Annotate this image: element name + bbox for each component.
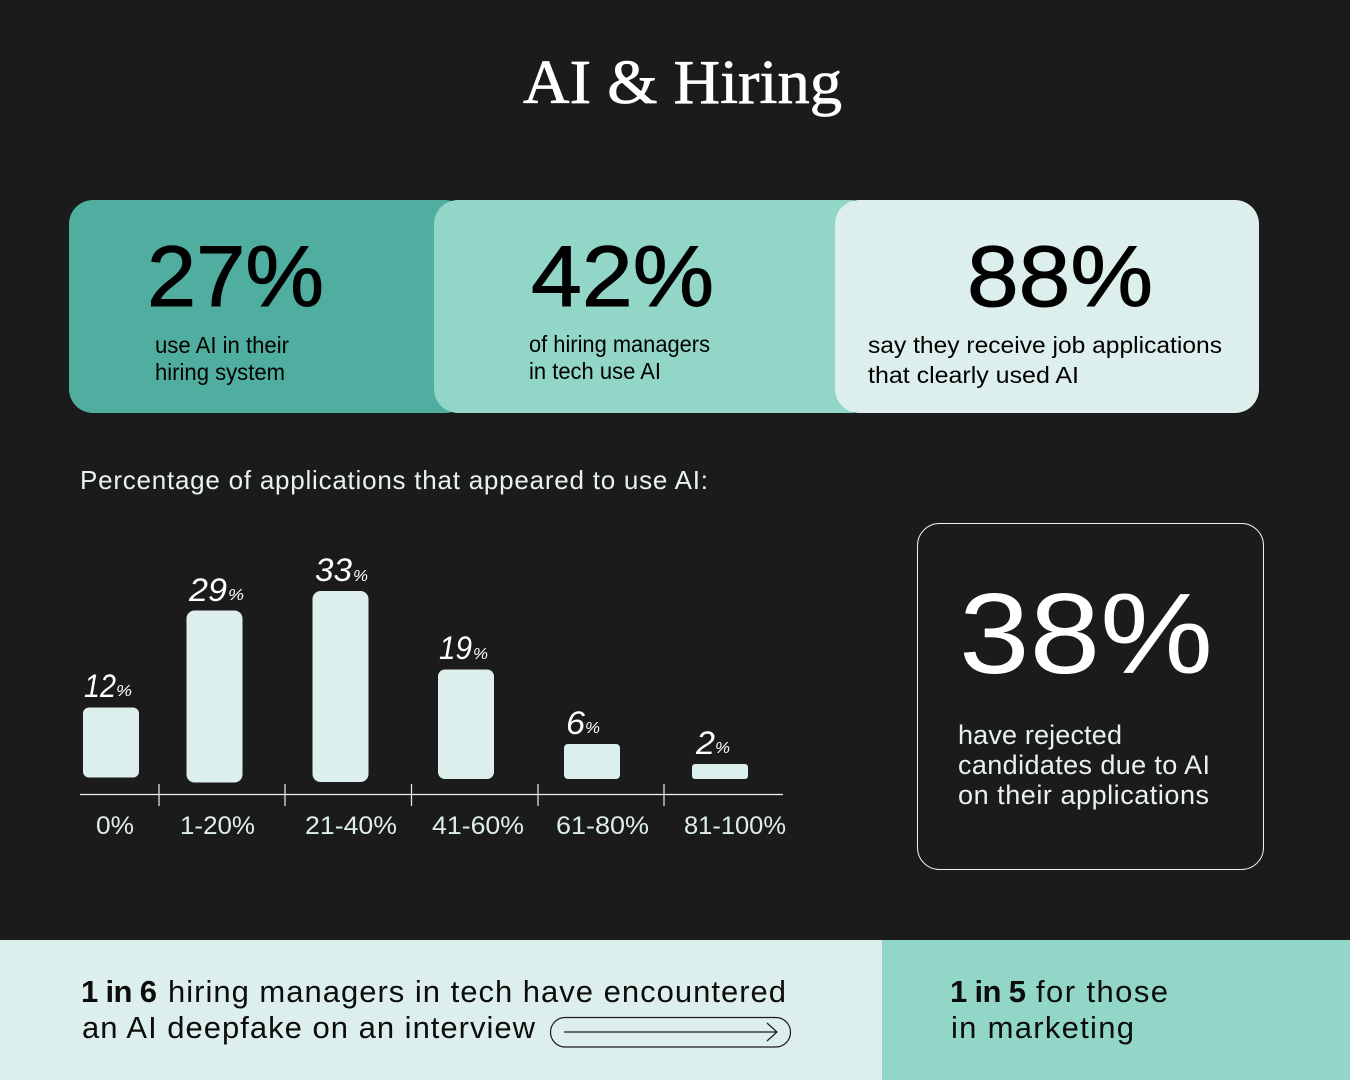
bar: 1-20%: 1-20% bbox=[180, 812, 255, 840]
panel: stat cards bbox=[69, 200, 1259, 413]
panel: 88% stat bbox=[835, 200, 1259, 413]
panel: 42% stat bbox=[434, 200, 874, 413]
panel: deepfake banner: hiring managers in tech have encountered bbox=[168, 974, 786, 1009]
panel: 38% callout: have rejected bbox=[958, 720, 1122, 750]
bar: 0%: 12 bbox=[84, 668, 116, 704]
title: AI & Hiring bbox=[523, 49, 842, 117]
chart heading: Percentage of applications that appeared to use AI: bbox=[80, 465, 708, 495]
bar: 61-80%: % bbox=[585, 720, 600, 737]
panel: deepfake banner bbox=[0, 940, 882, 1080]
panel: marketing banner bbox=[882, 940, 1350, 1080]
bar: 61-80% bbox=[556, 705, 649, 840]
panel: deepfake banner: an AI deepfake on an interview bbox=[82, 1010, 536, 1045]
panel: marketing banner: in marketing bbox=[951, 1010, 1134, 1045]
panel: marketing banner: 1 in 5 bbox=[950, 974, 1026, 1009]
bar: 81-100%: 81-100% bbox=[684, 812, 786, 840]
bar: 61-80%: 61-80% bbox=[556, 812, 649, 840]
panel: 27% stat: hiring system bbox=[155, 359, 285, 385]
panel: 38% callout bbox=[918, 524, 1264, 870]
panel: 42% stat: in tech use AI bbox=[529, 358, 661, 384]
panel: 88% stat: say they receive job applications bbox=[868, 332, 1222, 358]
panel: deepfake banner: 1 in 6 bbox=[81, 974, 157, 1009]
bar: 81-100%: % bbox=[715, 740, 730, 757]
bar: 41-60% bbox=[432, 630, 524, 840]
bar: 21-40% bbox=[305, 552, 397, 840]
bar: 21-40%: 33 bbox=[315, 552, 352, 588]
panel: 88% stat: that clearly used AI bbox=[868, 362, 1079, 388]
bar: 0% bbox=[83, 668, 139, 840]
bar: 41-60%: % bbox=[473, 646, 488, 663]
panel: marketing banner: for those bbox=[1036, 974, 1168, 1009]
bar: 21-40%: 21-40% bbox=[305, 812, 397, 840]
panel: 88% stat: 88% bbox=[967, 229, 1153, 325]
panel: 27% stat bbox=[69, 200, 469, 413]
panel: 38% callout: on their applications bbox=[958, 780, 1209, 810]
icon: arrow bbox=[550, 1018, 790, 1047]
panel: 27% stat: 27% bbox=[147, 229, 324, 325]
bar: 81-100% bbox=[684, 725, 786, 840]
bar: 41-60%: 41-60% bbox=[432, 812, 524, 840]
panel: 38% callout: 38% bbox=[959, 571, 1213, 698]
bar: 0%: % bbox=[116, 683, 132, 700]
bar: 1-20%: % bbox=[228, 587, 244, 604]
bar: 81-100%: 2 bbox=[695, 725, 715, 761]
panel: 42% stat: 42% bbox=[531, 229, 714, 325]
bar chart bbox=[80, 552, 786, 840]
bar: 1-20% bbox=[180, 572, 255, 840]
panel: 27% stat: use AI in their bbox=[155, 332, 289, 358]
chart axis bbox=[80, 784, 783, 806]
panel: 42% stat: of hiring managers bbox=[529, 331, 710, 357]
bar: 41-60%: 19 bbox=[439, 630, 472, 666]
bar: 1-20%: 29 bbox=[188, 572, 227, 608]
bar: 21-40%: % bbox=[353, 568, 368, 585]
bar: 61-80%: 6 bbox=[566, 705, 585, 741]
bar: 0%: 0% bbox=[96, 812, 134, 840]
panel: 38% callout: candidates due to AI bbox=[958, 750, 1210, 780]
